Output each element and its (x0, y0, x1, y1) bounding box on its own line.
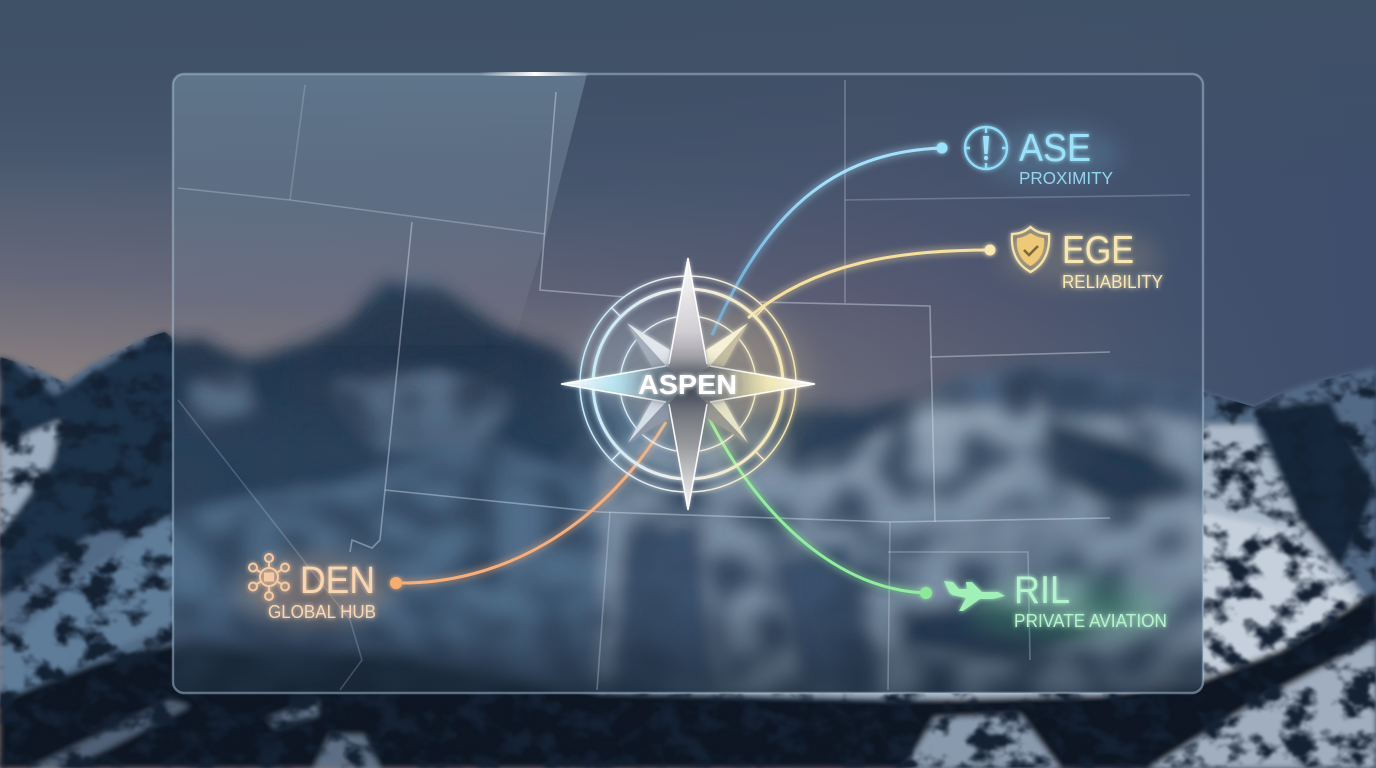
map: state boundary lines (178, 80, 1190, 690)
panel border (173, 74, 1203, 693)
label: EGE (1062, 229, 1134, 272)
label glow (980, 127, 1120, 183)
icon: network hub (249, 554, 289, 600)
label glow (970, 582, 1170, 638)
hub: Aspen compass rose (561, 258, 815, 510)
blurred mountains behind glass (173, 74, 1203, 693)
compass rings (580, 276, 796, 492)
compass diagonal points (627, 323, 748, 443)
route: DEN (396, 422, 666, 583)
sublabel: RELIABILITY (1062, 272, 1163, 292)
sublabel: PRIVATE AVIATION (1014, 611, 1167, 631)
sublabel: GLOBAL HUB (268, 602, 376, 622)
label glow (1000, 230, 1160, 286)
icon: shield check (1012, 227, 1049, 272)
compass centre shade (642, 368, 734, 400)
label glow (240, 558, 390, 622)
compass edge highlights (561, 258, 815, 510)
label: ASE (1019, 127, 1091, 170)
icon: alert compass (965, 127, 1007, 169)
node (920, 587, 932, 599)
destination: DEN (240, 554, 402, 622)
panel: frosted glass map (172, 72, 1204, 694)
route: EGE (748, 250, 990, 318)
node (984, 244, 996, 256)
destination: RIL (920, 569, 1170, 638)
node (390, 577, 402, 589)
icon: private jet (944, 581, 1005, 611)
compass halo (575, 309, 805, 459)
sublabel: PROXIMITY (1019, 168, 1113, 188)
label: ASPEN: ASPEN (638, 369, 737, 400)
route: ASE (712, 148, 942, 335)
destination: EGE (984, 227, 1163, 292)
background: snowy mountains (0, 328, 1376, 768)
node (936, 142, 948, 154)
label: RIL (1014, 569, 1070, 612)
destination: ASE (936, 127, 1120, 188)
label: DEN (300, 560, 375, 602)
route: RIL (708, 416, 926, 593)
top edge highlight (480, 72, 590, 76)
compass main points (561, 258, 815, 510)
